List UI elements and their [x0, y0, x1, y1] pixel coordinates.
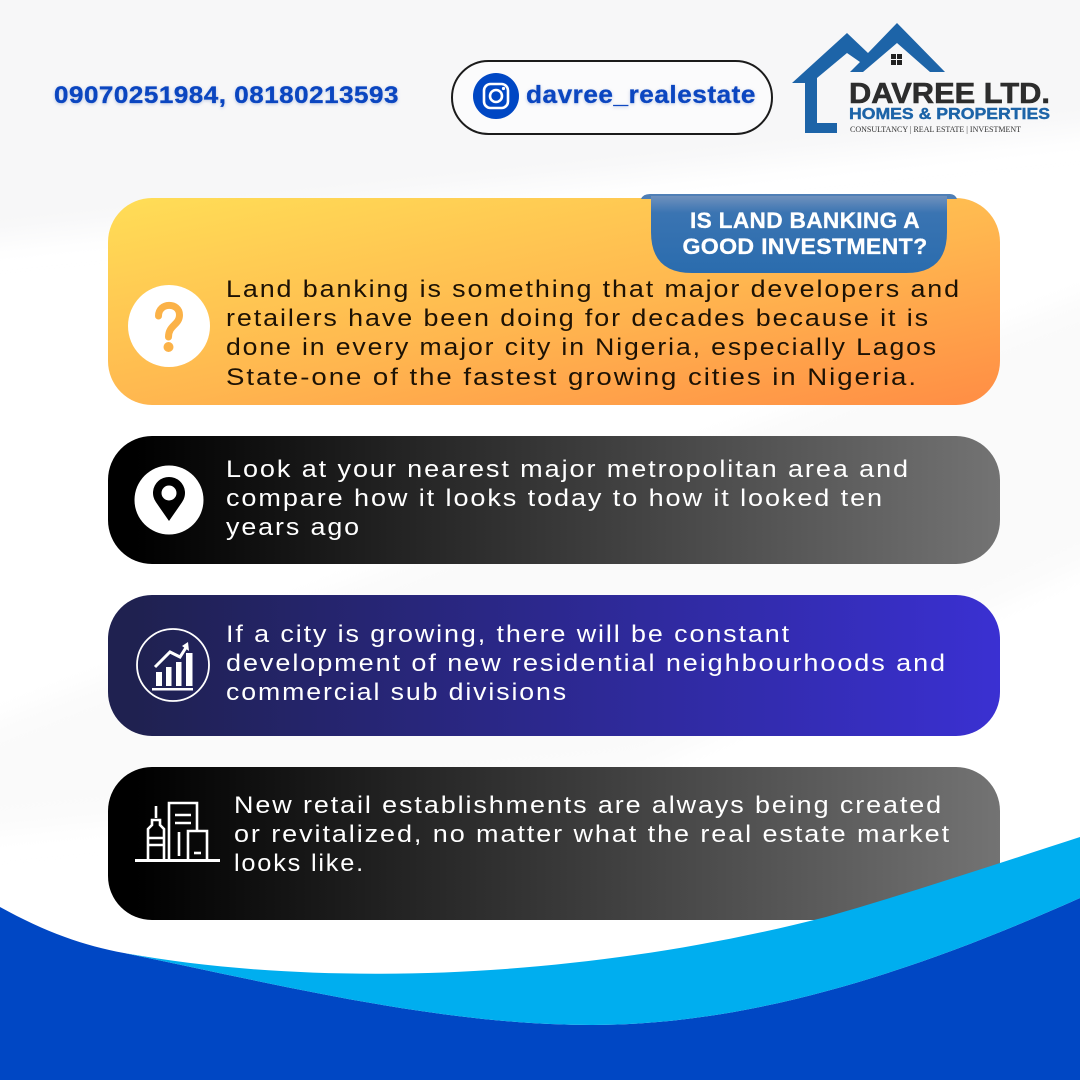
icon: window — [891, 54, 902, 65]
logo — [792, 23, 1050, 134]
panel: metropolitan — [108, 436, 1000, 564]
growing city text: If a city is growing, there will be constant — [226, 621, 791, 648]
metropolitan text: Look at your nearest major metropolitan area and — [226, 456, 910, 483]
logo services: CONSULTANCY | REAL ESTATE | INVESTMENT — [850, 125, 1021, 134]
metropolitan text: years ago — [226, 514, 361, 541]
retail text: New retail establishments are always being created — [234, 792, 943, 819]
logo name: DAVREE LTD. — [849, 78, 1050, 110]
metropolitan text — [226, 456, 910, 541]
intro text: done in every major city in Nigeria, especially Lagos — [226, 334, 938, 361]
instagram pill — [452, 61, 772, 134]
intro text: Land banking is something that major developers and — [226, 276, 961, 303]
retail text: or revitalized, no matter what the real estate market — [234, 821, 951, 848]
heading text — [682, 208, 928, 259]
panel: intro — [108, 198, 1000, 405]
icon: question mark — [128, 285, 210, 367]
heading text: IS LAND BANKING A — [690, 208, 920, 233]
panel: growing city — [108, 595, 1000, 736]
panel: retail — [108, 767, 1000, 920]
wave: dark blue base — [0, 898, 1080, 1080]
growing city text: commercial sub divisions — [226, 679, 568, 706]
icon: house roofline — [792, 23, 945, 133]
icon: city buildings — [135, 803, 220, 860]
retail text: looks like. — [234, 850, 365, 877]
icon: growth chart — [137, 629, 209, 701]
heading tab — [641, 194, 957, 273]
icon: instagram — [473, 73, 519, 119]
intro text — [226, 276, 961, 391]
logo tagline: HOMES & PROPERTIES — [849, 106, 1050, 123]
intro text: retailers have been doing for decades because it is — [226, 305, 930, 332]
metropolitan text: compare how it looks today to how it looked ten — [226, 485, 884, 512]
retail text — [234, 792, 951, 877]
instagram handle: davree_realestate — [526, 81, 756, 109]
heading text: GOOD INVESTMENT? — [682, 234, 928, 259]
wave: light blue band — [124, 837, 1080, 1025]
growing city text — [226, 621, 947, 706]
growing city text: development of new residential neighbourhoods and — [226, 650, 947, 677]
intro text: State-one of the fastest growing cities in Nigeria. — [226, 364, 918, 391]
icon: location pin — [134, 466, 204, 534]
phone numbers: 09070251984, 08180213593 — [54, 82, 399, 109]
